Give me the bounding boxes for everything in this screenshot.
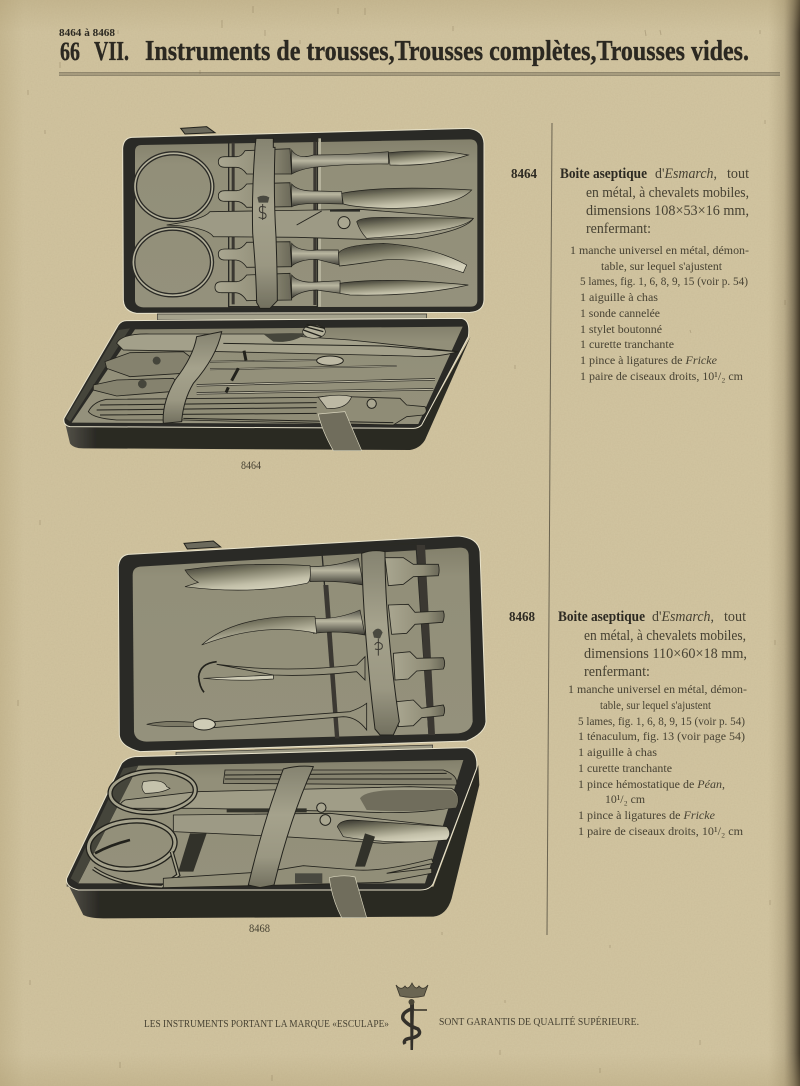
- retaining strap with mark: [252, 138, 277, 308]
- row 1 knife and spoon: [117, 334, 458, 357]
- product description 8468: tout: [724, 609, 747, 625]
- tool bundle at top: [223, 770, 457, 785]
- product description 8468: renfermant:: [584, 664, 650, 680]
- heading: page title: 66: [60, 37, 80, 66]
- scissors body: [167, 209, 473, 239]
- contents list 8468: 5 lames, fig. 1, 6, 8, 9, 15 (voir p. 54): [578, 716, 745, 728]
- contents list 8468: 1 ténaculum, fig. 13 (voir page 54): [578, 731, 745, 743]
- product description 8468: Boite aseptique: [558, 609, 645, 625]
- footer note: LES INSTRUMENTS PORTANT LA MARQUE «ESCULAPE»: [144, 1019, 389, 1030]
- instrument handle plugs: [218, 149, 292, 174]
- item number 8468: 8468: [509, 610, 535, 625]
- contents list 8464: 1 aiguille à chas: [580, 292, 659, 304]
- forceps: [163, 859, 433, 888]
- contents list 8464: 1 paire de ciseaux droits, 10¹/₂ cm: [580, 371, 743, 383]
- scissors rings: [135, 153, 212, 220]
- row 4 forceps: [88, 396, 426, 425]
- front clasp strap: [329, 876, 367, 918]
- product description 8464: dimensions 108×53×16 mm,: [586, 203, 749, 219]
- upper lid of the case: [123, 128, 484, 313]
- frame pegs: [226, 351, 246, 393]
- blade 5: [292, 275, 341, 298]
- contents list 8464: 5 lames, fig. 1, 6, 8, 9, 15 (voir p. 54): [580, 276, 748, 288]
- header rule: [59, 72, 780, 76]
- tray strap: [248, 766, 313, 888]
- product description 8464: [560, 166, 750, 237]
- contents list 8464: table, sur lequel s'ajustent: [601, 261, 723, 273]
- blade 2 and handle: [388, 604, 444, 634]
- blade 3 curved hook and handle: [393, 652, 445, 680]
- contents list 8464: 1 stylet boutonné: [580, 324, 662, 336]
- hinge: [157, 314, 427, 320]
- product description 8468: dimensions 110×60×18 mm,: [584, 646, 747, 662]
- contents list 8468: 1 aiguille à chas: [578, 747, 658, 759]
- header: number range: 8464 à 8468: [59, 28, 115, 39]
- text block: product 8464: [511, 166, 750, 383]
- product description 8464: en métal, à chevalets mobiles,: [586, 185, 749, 201]
- product description 8464: renfermant:: [586, 221, 651, 237]
- contents list 8468: 1 pince hémostatique de Péan,: [578, 779, 725, 791]
- contents list 8464: 1 sonde cannelée: [580, 308, 660, 320]
- contents list 8468: 10¹/₂ cm: [605, 794, 645, 806]
- product description 8464: Boite aseptique: [560, 166, 647, 182]
- lower tray of the case: [64, 318, 471, 451]
- product description 8468: en métal, à chevalets mobiles,: [584, 628, 746, 644]
- illustration: instrument case 8468: [66, 536, 486, 918]
- caption: 8468: 8468: [249, 923, 270, 935]
- blade 1 and handle: [385, 558, 439, 586]
- lower tray of the case: [66, 748, 479, 918]
- item number 8464: 8464: [511, 167, 537, 182]
- product description 8464: tout: [727, 166, 750, 182]
- blade 4: [292, 243, 339, 266]
- frame posts: [178, 833, 207, 872]
- contents list 8464: 1 manche universel en métal, démon-: [570, 245, 749, 257]
- contents list 8464: 1 pince à ligatures de Fricke: [580, 355, 717, 367]
- blade 1: [292, 150, 388, 174]
- upper scissors: [120, 787, 458, 813]
- column divider line: [547, 123, 552, 935]
- blade 4 needle and handle: [397, 700, 445, 727]
- product description 8464: d'Esmarch,: [655, 166, 717, 182]
- product description 8468: d'Esmarch,: [652, 609, 714, 625]
- contents list 8468: 1 curette tranchante: [578, 763, 672, 775]
- caption: 8464: 8464: [241, 460, 261, 472]
- upper lid of the case: [118, 536, 486, 752]
- blade 2: [292, 184, 343, 207]
- contents list 8468: 1 paire de ciseaux droits, 10¹/₂ cm: [578, 826, 743, 838]
- contents list 8468: 1 pince à ligatures de Fricke: [578, 810, 715, 822]
- footer note: [144, 1016, 639, 1030]
- icon: Esculape crown and serpent staff mark: [396, 983, 428, 1050]
- heading: page title: VII.: [94, 36, 129, 66]
- tray strap: [163, 332, 222, 423]
- contents list 8464: [570, 245, 749, 383]
- illustration: instrument case 8464: [64, 127, 484, 451]
- lid catch tab: [184, 541, 221, 549]
- lower scissors: [173, 813, 449, 843]
- text block: product 8468: [509, 609, 747, 838]
- row 2 handle, spoon and needle: [105, 352, 190, 377]
- footer note: SONT GARANTIS DE QUALITÉ SUPÉRIEURE.: [439, 1016, 639, 1028]
- front clasp strap: [318, 412, 362, 451]
- contents list 8468: table, sur lequel s'ajustent: [600, 700, 712, 712]
- retaining strap with mark: [362, 551, 399, 735]
- lid catch tab: [181, 127, 215, 134]
- contents list 8468: [568, 684, 747, 838]
- row 3 handle and probes: [93, 378, 180, 396]
- hinge: [176, 745, 433, 760]
- contents list 8464: 1 curette tranchante: [580, 339, 674, 351]
- contents list 8468: 1 manche universel en métal, démon-: [568, 684, 747, 696]
- product description 8468: [558, 609, 747, 680]
